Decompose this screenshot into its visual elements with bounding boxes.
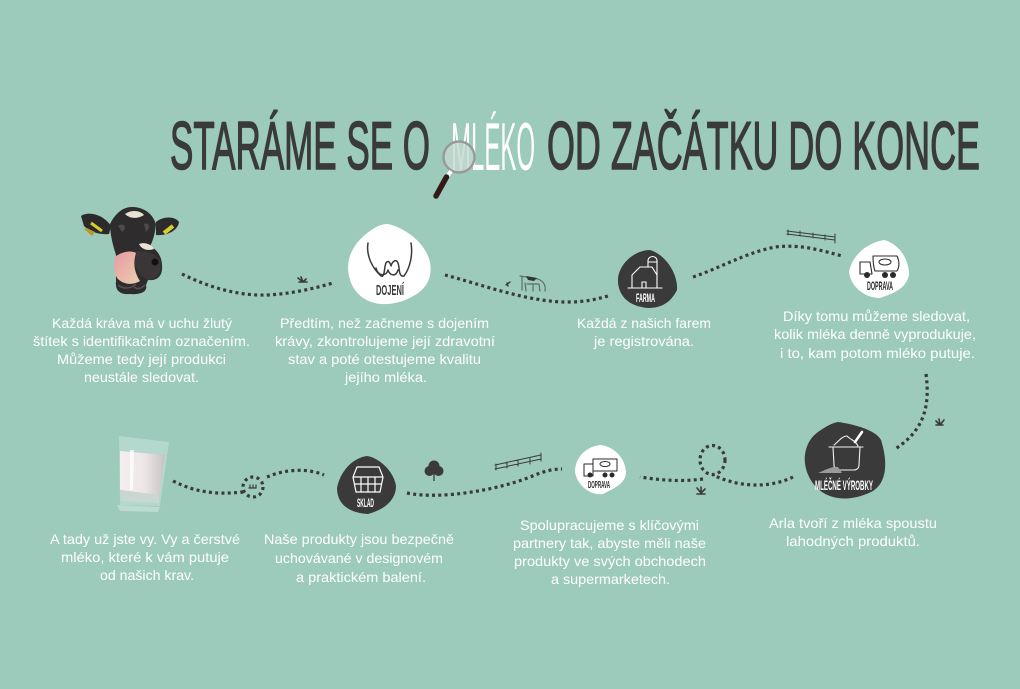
- icon: yoghurt pot: [829, 436, 863, 470]
- blob: doprava top: DOPRAVA: [867, 279, 893, 293]
- text block: partners: [513, 517, 706, 587]
- text block: cow: neustále sledovat.: [84, 369, 199, 385]
- blob: doprava bottom: [575, 445, 626, 494]
- text block: milking: stav a poté otestujeme kvalitu: [288, 351, 481, 367]
- dotted path: glass to warehouse: [173, 470, 324, 497]
- title: [170, 108, 980, 185]
- text block: farm: [577, 315, 711, 349]
- blob: doprava bottom: DOPRAVA: [588, 479, 610, 491]
- icon: spoon: [855, 432, 862, 442]
- icon: milk glass: [117, 436, 169, 512]
- text block: dairy products: [769, 515, 937, 549]
- text block: cow: [33, 315, 250, 385]
- icon: basket: [353, 467, 383, 492]
- text block: dairy products: lahodných produktů.: [786, 533, 920, 549]
- text block: partners: partnery tak, abyste měli naše: [513, 535, 706, 551]
- icon: tanker truck: [860, 256, 899, 278]
- text block: warehouse: Naše produkty jsou bezpečně: [264, 531, 454, 547]
- blob: sklad: [337, 456, 396, 514]
- icon: grains: [818, 467, 842, 473]
- text block: milking: krávy, zkontrolujeme její zdravotní: [275, 333, 495, 349]
- label: dojení: DOJENÍ: [376, 282, 404, 299]
- text block: cow: Každá kráva má v uchu žlutý: [52, 315, 232, 331]
- title: STARÁME SE O: [170, 108, 430, 184]
- dotted path: farm to transport: [693, 246, 842, 277]
- text block: dairy products: Arla tvoří z mléka spoustu: [769, 515, 937, 531]
- text block: warehouse: a praktickém balení.: [296, 569, 426, 585]
- text block: transport: [774, 308, 976, 361]
- icon: grass 2: [506, 282, 510, 286]
- icon: fence bottom: [495, 453, 541, 470]
- icon: udder: [368, 243, 412, 276]
- blob: dojení: [348, 224, 431, 304]
- blob: farma: [618, 250, 677, 308]
- dotted path: products to partners: [640, 446, 793, 485]
- icon: fence top: [787, 230, 835, 243]
- icon: grass 1: [298, 277, 307, 282]
- icon: tanker truck bottom: [584, 459, 617, 478]
- icon: grass 3: [936, 419, 944, 425]
- text block: cow: štítek s identifikačním označením.: [33, 333, 250, 349]
- icon: barn and silo: [628, 256, 662, 288]
- text block: milking: Předtím, než začneme s dojením: [280, 315, 489, 331]
- text block: consumer: [50, 531, 240, 583]
- icon: magnifying glass: [436, 142, 474, 196]
- text block: cow: Můžeme tedy její produkci: [57, 351, 226, 367]
- blob: mléčné výrobky: MLÉČNÉ VÝROBKY: [815, 476, 873, 493]
- text block: transport: i to, kam potom mléko putuje.: [780, 345, 975, 361]
- text block: consumer: od našich krav.: [100, 567, 194, 583]
- blob: sklad: SKLAD: [357, 496, 374, 510]
- text block: consumer: A tady už jste vy. Vy a čerstvé: [50, 531, 240, 547]
- title: MLÉKO: [451, 109, 535, 185]
- text block: transport: kolik mléka denně vyprodukuje,: [774, 326, 976, 342]
- text block: partners: a supermarketech.: [551, 571, 670, 587]
- text block: consumer: mléko, které k vám putuje: [61, 549, 229, 565]
- text block: warehouse: uchovávané v designovém: [275, 550, 443, 566]
- text block: milking: [275, 315, 495, 385]
- blob: farma: FARMA: [636, 291, 655, 305]
- text block: warehouse: [264, 531, 454, 585]
- dotted path: transport to products: [895, 374, 927, 449]
- text block: farm: je registrována.: [593, 333, 694, 349]
- dotted path: partners to warehouse: [407, 469, 562, 495]
- icon: tree: [424, 460, 444, 481]
- icon: grass 4: [697, 487, 705, 494]
- text block: partners: produkty ve svých obchodech: [514, 553, 706, 569]
- icon: grass 5: [249, 485, 256, 488]
- icon: grazing cow: [520, 276, 545, 291]
- text block: partners: Spolupracujeme s klíčovými: [520, 517, 699, 533]
- blob: doprava top: [849, 240, 909, 298]
- dotted path: milking to farm: [445, 275, 608, 302]
- blob: mléčné výrobky: [805, 422, 885, 498]
- icon: cow head: [81, 207, 179, 294]
- text block: transport: Díky tomu můžeme sledovat,: [783, 308, 970, 324]
- dotted path: cow to milking: [182, 274, 333, 295]
- text block: farm: Každá z našich farem: [577, 315, 711, 331]
- text block: milking: jejího mléka.: [344, 369, 427, 385]
